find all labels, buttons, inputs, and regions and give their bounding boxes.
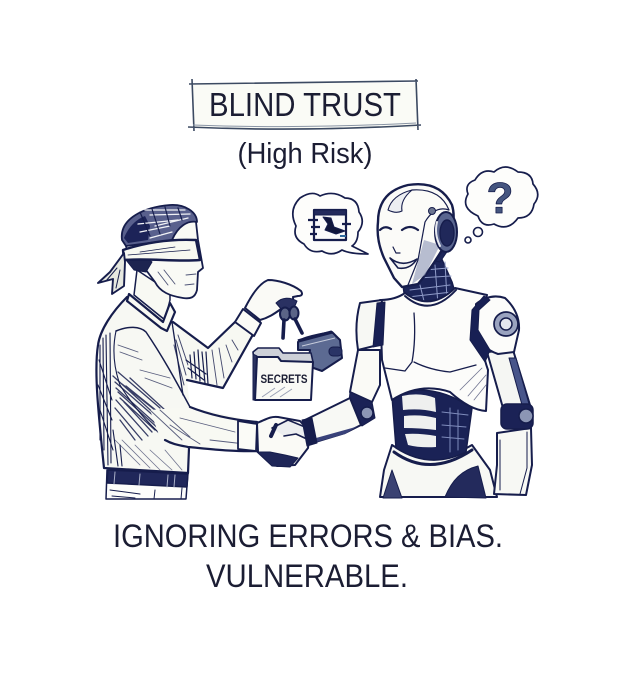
thought bubble with question mark (465, 167, 538, 243)
keys (276, 298, 302, 338)
man's raised arm (173, 309, 261, 388)
man figure blindfolded (96, 205, 310, 499)
terminal icon (308, 210, 351, 240)
subtitle: high risk: (High Risk) (238, 138, 372, 170)
man's raised hand (245, 280, 302, 320)
title box: blind trust: BLIND TRUST (209, 86, 401, 123)
robot's earpiece (435, 212, 457, 252)
robot's hips (380, 445, 497, 498)
title box: blind trust (188, 79, 421, 131)
blindfold (98, 240, 200, 294)
clasped hands handshake (257, 417, 310, 467)
secrets folder with wallet (253, 332, 342, 400)
robot's neck (403, 255, 456, 305)
wallet (298, 332, 342, 371)
robot figure (302, 184, 533, 498)
caption: vulnerable: VULNERABLE. (206, 558, 408, 594)
caption: ignoring errors and bias: IGNORING ERRORS & BIAS. (113, 518, 503, 554)
thought bubble with question mark: ? (487, 174, 513, 223)
speech bubble with terminal icon (293, 193, 368, 254)
robot's shoulder (470, 296, 519, 362)
robot's head with earpiece (378, 184, 457, 287)
man's shirt torso (96, 297, 190, 473)
robot's chest (380, 288, 488, 411)
man's head with hair (122, 205, 203, 298)
man's extended arm (150, 407, 258, 451)
man's collar (127, 294, 175, 331)
folder: SECRETS (260, 374, 308, 386)
man's trousers and belt (106, 470, 188, 499)
man's neck (134, 270, 170, 320)
robot's abdomen (392, 390, 472, 460)
robot's left arm reaching to handshake (302, 300, 385, 446)
robot's right arm (viewer's right) (487, 350, 533, 495)
